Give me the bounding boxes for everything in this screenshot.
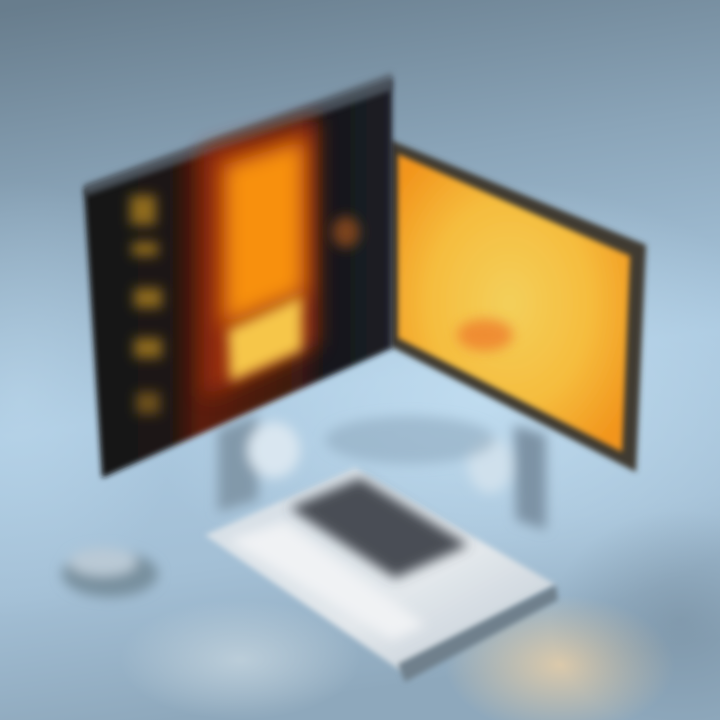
left monitor <box>84 72 392 478</box>
keyboard shadow edge <box>398 585 558 682</box>
sidebar items <box>130 195 162 414</box>
right monitor red mark <box>457 319 513 351</box>
yellow panel <box>228 296 302 382</box>
monitor stands <box>218 415 546 530</box>
keyboard keys <box>290 478 468 578</box>
left top edge highlight <box>84 72 392 196</box>
icon: mouse <box>62 548 158 597</box>
keyboard <box>205 468 558 682</box>
right monitor <box>390 140 646 472</box>
left monitor frame <box>84 78 392 478</box>
red glow around panels <box>204 118 318 398</box>
right monitor frame <box>390 140 646 472</box>
palm rest <box>228 522 425 640</box>
orange panel <box>224 140 304 325</box>
right column items <box>332 216 360 248</box>
keyboard base <box>205 468 556 670</box>
right monitor screen <box>398 154 630 452</box>
